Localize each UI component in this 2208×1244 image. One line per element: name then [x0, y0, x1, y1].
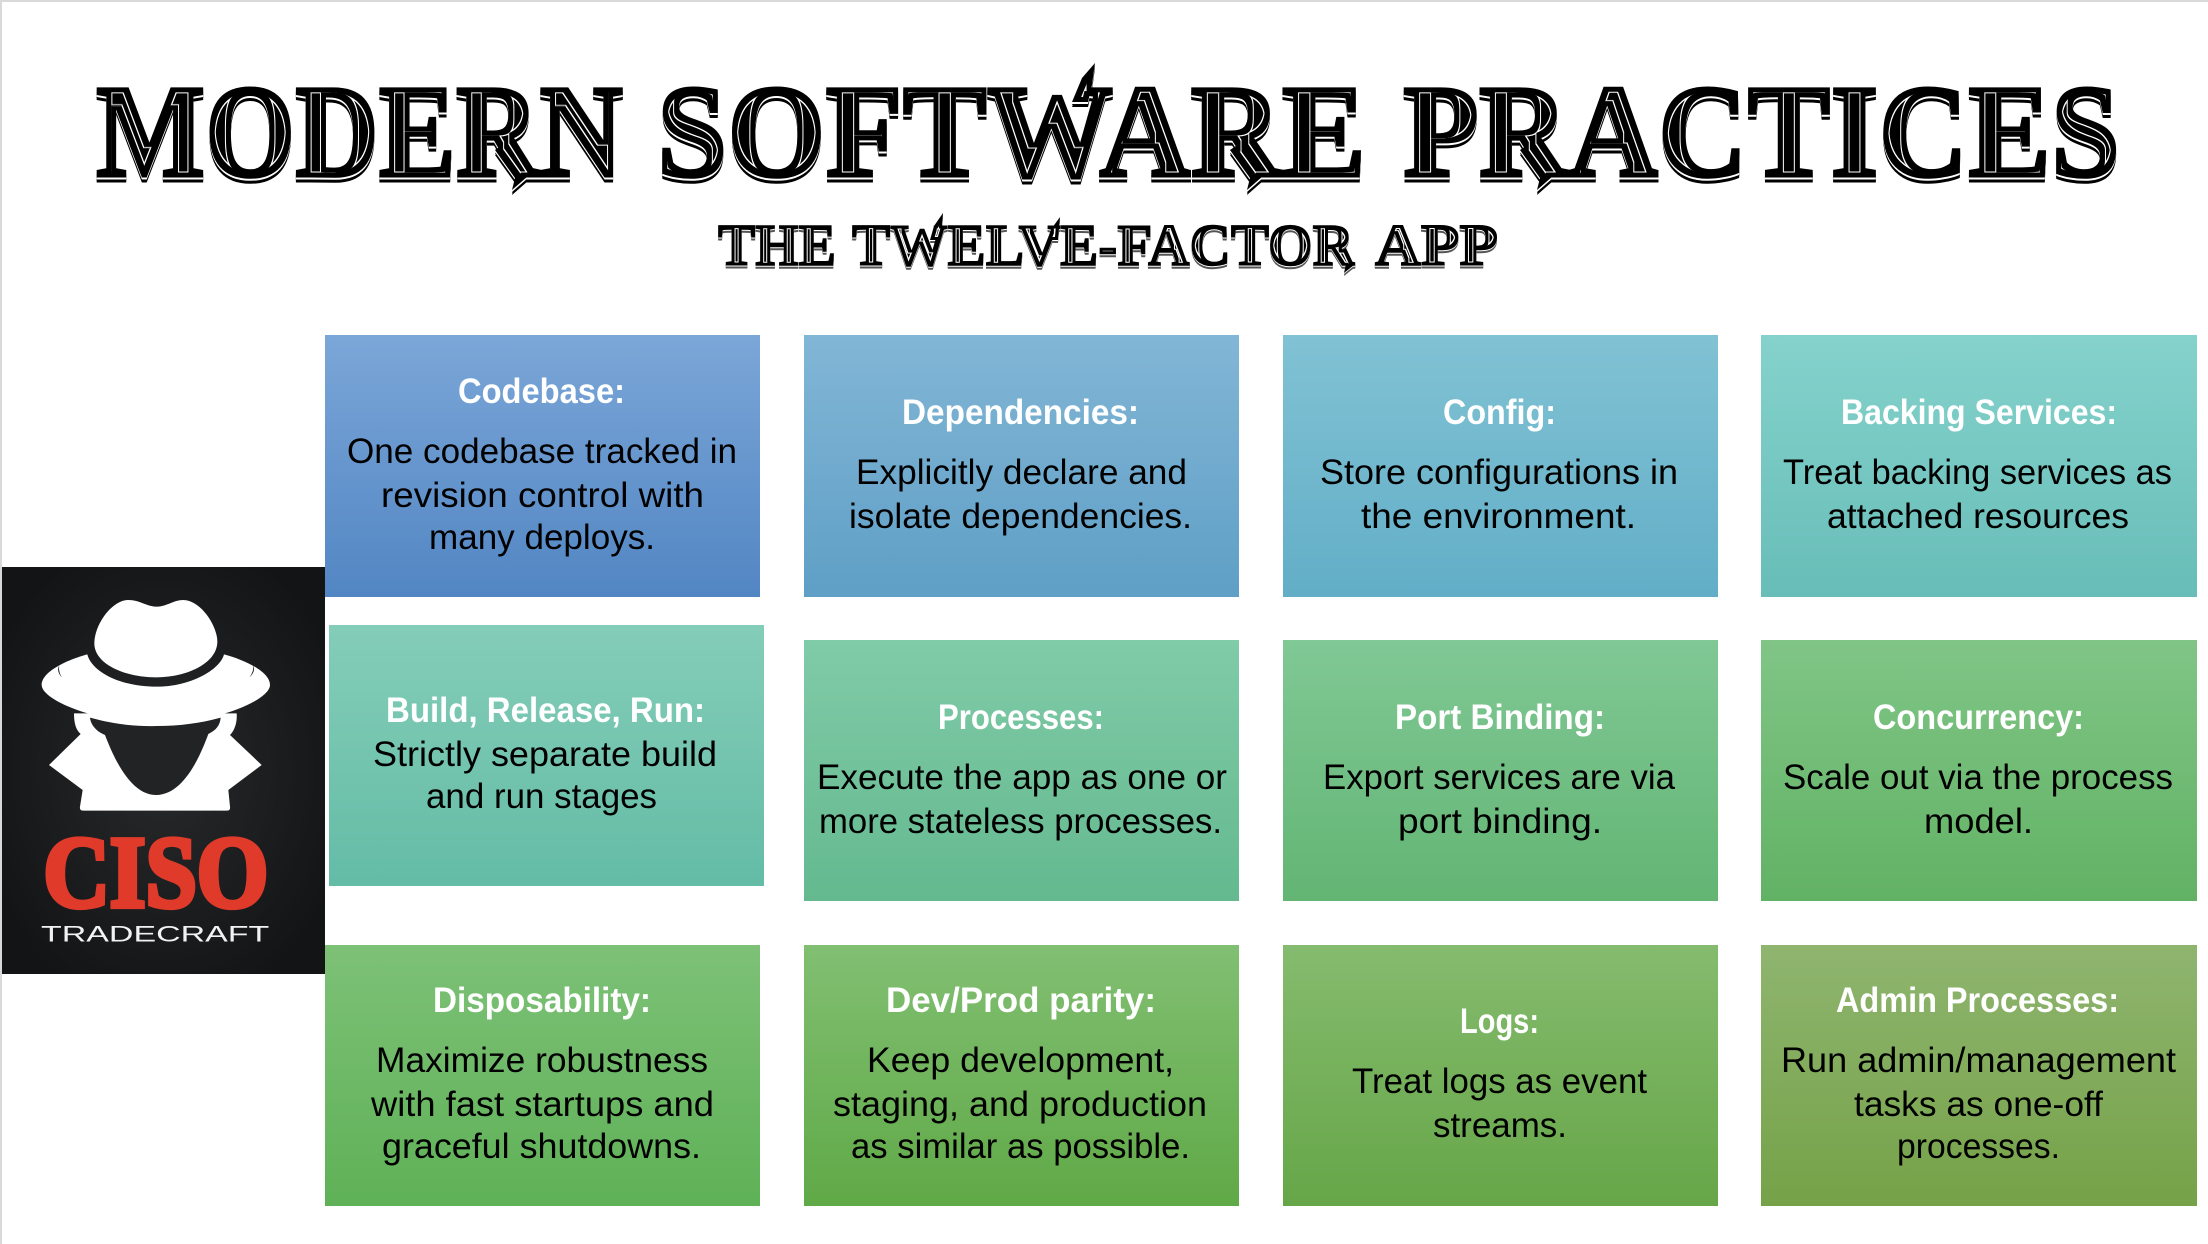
- description: Disposability: with fast startups and: [370, 1085, 714, 1124]
- panel: Admin Processes: [1761, 945, 2197, 1206]
- description: Concurrency: model.: [1924, 802, 2033, 841]
- description: Backing Services: [1783, 453, 2172, 536]
- description: Logs: [1352, 1062, 1647, 1145]
- description: Disposability: Maximize robustness: [376, 1041, 708, 1080]
- panel: Processes: [804, 640, 1239, 901]
- description: Build, Release, Run: Strictly separate build: [373, 735, 717, 774]
- description: Config: the environment.: [1361, 497, 1636, 536]
- subtitle: TWELVE-FACTOR: [852, 212, 1355, 278]
- title: [96, 57, 2120, 205]
- description: Dev/Prod parity: [833, 1041, 1207, 1166]
- panel: Config: [1283, 335, 1718, 597]
- subtitle: [718, 212, 1498, 278]
- description: Backing Services: Treat backing services as: [1783, 453, 2172, 492]
- description: Backing Services: attached resources: [1827, 497, 2129, 536]
- description: Port Binding: port binding.: [1398, 802, 1602, 841]
- description: Disposability: [370, 1041, 714, 1166]
- description: Config: Store configurations in: [1320, 453, 1678, 492]
- subtitle: APP: [1375, 212, 1498, 278]
- description: Admin Processes: processes.: [1897, 1127, 2060, 1166]
- heading: Processes: Processes:: [938, 698, 1104, 737]
- panel: Build, Release, Run: [329, 625, 764, 886]
- heading: Concurrency: Concurrency:: [1873, 698, 2084, 737]
- heading: Dev/Prod parity: Dev/Prod parity:: [886, 981, 1156, 1020]
- heading: Port Binding: Port Binding:: [1395, 698, 1605, 737]
- heading: Codebase: Codebase:: [458, 372, 625, 411]
- heading: Disposability: Disposability:: [433, 981, 651, 1020]
- heading: Build, Release, Run: Build, Release, Run:: [386, 691, 705, 730]
- description: Concurrency: [1783, 758, 2173, 841]
- description: Processes: Execute the app as one or: [817, 758, 1227, 797]
- panel: Logs: [1283, 945, 1718, 1206]
- description: Codebase: One codebase tracked in: [347, 432, 737, 471]
- heading: Logs: Logs:: [1460, 1002, 1539, 1041]
- panel: Codebase: [325, 335, 760, 597]
- panel: Port Binding: [1283, 640, 1718, 901]
- panel: Dev/Prod parity: [804, 945, 1239, 1206]
- description: Port Binding: Export services are via: [1323, 758, 1676, 797]
- panel: Concurrency: [1761, 640, 2197, 901]
- heading: Backing Services: Backing Services:: [1841, 393, 2117, 432]
- wordmark: CISO: CISO: [43, 817, 268, 930]
- panel: Dependencies: [804, 335, 1239, 597]
- description: Concurrency: Scale out via the process: [1783, 758, 2173, 797]
- title: SOFTWARE: [657, 57, 1366, 205]
- description: Build, Release, Run: [373, 735, 717, 816]
- description: Admin Processes: Run admin/management: [1781, 1041, 2176, 1080]
- wordmark: TRADECRAFT: TRADECRAFT: [41, 922, 270, 947]
- description: Dependencies: Explicitly declare and: [856, 453, 1187, 492]
- heading: Admin Processes: Admin Processes:: [1836, 981, 2119, 1020]
- description: Processes: more stateless processes.: [819, 802, 1222, 841]
- description: Dev/Prod parity: Keep development,: [867, 1041, 1174, 1080]
- description: Disposability: graceful shutdowns.: [382, 1127, 701, 1166]
- description: Dependencies: [849, 453, 1192, 536]
- description: Logs: streams.: [1433, 1106, 1567, 1145]
- description: Build, Release, Run: and run stages: [426, 777, 657, 816]
- description: Codebase: revision control with: [381, 476, 704, 515]
- description: Port Binding: [1323, 758, 1676, 841]
- description: Admin Processes: [1781, 1041, 2176, 1166]
- description: Admin Processes: tasks as one-off: [1854, 1085, 2103, 1124]
- description: Dependencies: isolate dependencies.: [849, 497, 1192, 536]
- title: MODERN: [96, 57, 623, 205]
- panel: Backing Services: [1761, 335, 2197, 597]
- icon: spy with hat and coat: [41, 600, 270, 947]
- description: Dev/Prod parity: staging, and production: [833, 1085, 1207, 1124]
- description: Processes: [817, 758, 1227, 841]
- description: Codebase: [347, 432, 737, 557]
- description: Config: [1320, 453, 1678, 536]
- heading: Dependencies: Dependencies:: [902, 393, 1139, 432]
- panel: Disposability: [325, 945, 760, 1206]
- subtitle: THE: [718, 212, 836, 278]
- logo: CISO Tradecraft: [2, 567, 325, 974]
- description: Dev/Prod parity: as similar as possible.: [851, 1127, 1190, 1166]
- description: Logs: Treat logs as event: [1352, 1062, 1647, 1101]
- heading: Config: Config:: [1443, 393, 1556, 432]
- title: PRACTICES: [1403, 57, 2120, 205]
- description: Codebase: many deploys.: [429, 518, 655, 557]
